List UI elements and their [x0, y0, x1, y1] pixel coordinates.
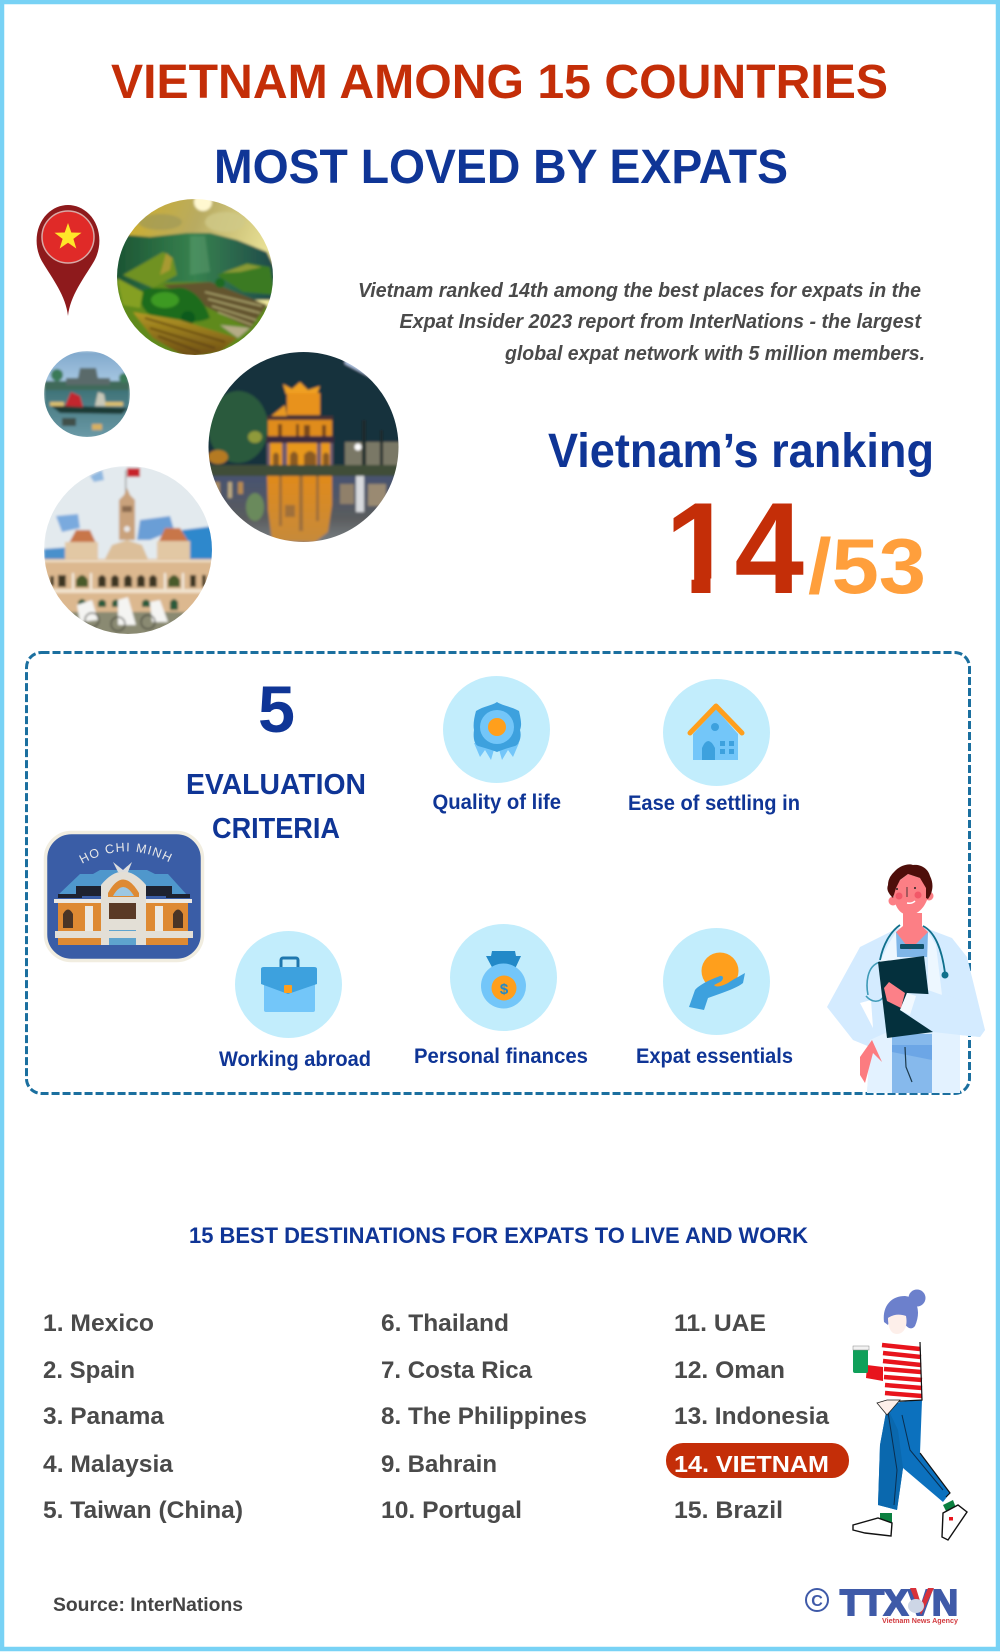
highlighted row: 14. Vietnam: [666, 1443, 849, 1478]
list column 2: 6. Thailand: [381, 1310, 509, 1337]
photo: terraced mountains: [115, 193, 275, 358]
list column 1: [43, 1310, 243, 1524]
source: Source: InterNations: [53, 1594, 243, 1616]
criterion: ease of settling in: Ease of settling in: [628, 792, 800, 815]
list column 2: 10. Portugal: [381, 1497, 522, 1524]
title: VIETNAM AMONG 15 COUNTRIES: [111, 56, 888, 109]
icon: Ho Chi Minh opera house badge: [44, 830, 204, 962]
list column 1: 5. Taiwan (China): [43, 1497, 243, 1524]
icon: Ho Chi Minh opera house badge: HO CHI MINH: [79, 842, 172, 864]
list column 2: 8. The Philippines: [381, 1403, 587, 1430]
ranking number 14/53: 14: [665, 475, 804, 621]
criterion: expat essentials: [636, 928, 793, 1068]
logo: TTXVN Vietnam News Agency: TTXVN: [840, 1582, 958, 1623]
illustration: woman walking with cup: [853, 1290, 967, 1540]
intro paragraph: Expat Insider 2023 report from InterNations - the largest: [400, 310, 922, 333]
criterion: personal finances: [414, 924, 588, 1068]
criterion: quality of life: [432, 676, 561, 814]
criterion: working abroad: [219, 931, 371, 1071]
list column 3: 12. Oman: [674, 1357, 785, 1384]
criterion: expat essentials: Expat essentials: [636, 1045, 793, 1068]
title: [111, 56, 888, 194]
icon: house: [690, 706, 742, 760]
icon: briefcase: [261, 958, 317, 1012]
icon: rosette badge: [474, 702, 521, 760]
photo: boat with lanterns on lake: [44, 351, 130, 438]
list column 1: 4. Malaysia: [43, 1451, 173, 1478]
list column 1: 3. Panama: [43, 1403, 164, 1430]
list column 2: 9. Bahrain: [381, 1451, 497, 1478]
title: MOST LOVED BY EXPATS: [214, 141, 788, 194]
heading: Vietnam's ranking: Vietnam’s ranking: [548, 425, 934, 478]
photo: Ho Chi Minh City Hall: [44, 466, 216, 636]
heading: 5 evaluation criteria: CRITERIA: [212, 813, 340, 845]
highlighted row: 14. Vietnam: 14. VIETNAM: [674, 1451, 829, 1477]
criterion: working abroad: Working abroad: [219, 1048, 371, 1071]
intro paragraph: Vietnam ranked 14th among the best places for expats in the: [358, 279, 921, 302]
panel: evaluation criteria: [25, 651, 985, 1095]
heading: 5 evaluation criteria: 5: [258, 672, 295, 746]
icon: money bag: $: [500, 981, 509, 998]
list column 3: 11. UAE: [674, 1310, 766, 1337]
photo: Turtle Tower at night: [206, 350, 402, 546]
intro paragraph: [358, 279, 925, 365]
list column 3: [666, 1310, 849, 1524]
criterion: personal finances: Personal finances: [414, 1045, 588, 1068]
list column 1: 1. Mexico: [43, 1310, 154, 1337]
heading: 15 best destinations: 15 BEST DESTINATIONS FOR EXPATS TO LIVE AND WORK: [189, 1223, 809, 1248]
ranking number 14/53: [655, 475, 926, 621]
ranking number 14/53: /53: [808, 522, 926, 610]
criterion: quality of life: Quality of life: [432, 791, 561, 814]
list column 3: 13. Indonesia: [674, 1403, 829, 1430]
criterion: ease of settling in: [628, 679, 800, 815]
logo: TTXVN Vietnam News Agency: Vietnam News Agency: [882, 1618, 958, 1625]
intro paragraph: global expat network with 5 million members.: [504, 342, 925, 365]
illustration: doctor: [827, 864, 985, 1093]
logo: TTXVN Vietnam News Agency: C: [811, 1593, 823, 1610]
heading: 5 evaluation criteria: [186, 672, 366, 845]
list column 3: 15. Brazil: [674, 1497, 783, 1524]
heading: 5 evaluation criteria: EVALUATION: [186, 769, 366, 801]
icon: hand holding coin: [689, 952, 745, 1010]
list column 1: 2. Spain: [43, 1357, 135, 1384]
icon: money bag: [481, 951, 526, 1008]
list column 2: [381, 1310, 587, 1524]
list column 2: 7. Costa Rica: [381, 1357, 532, 1384]
icon: Vietnam flag map pin: [37, 205, 99, 316]
